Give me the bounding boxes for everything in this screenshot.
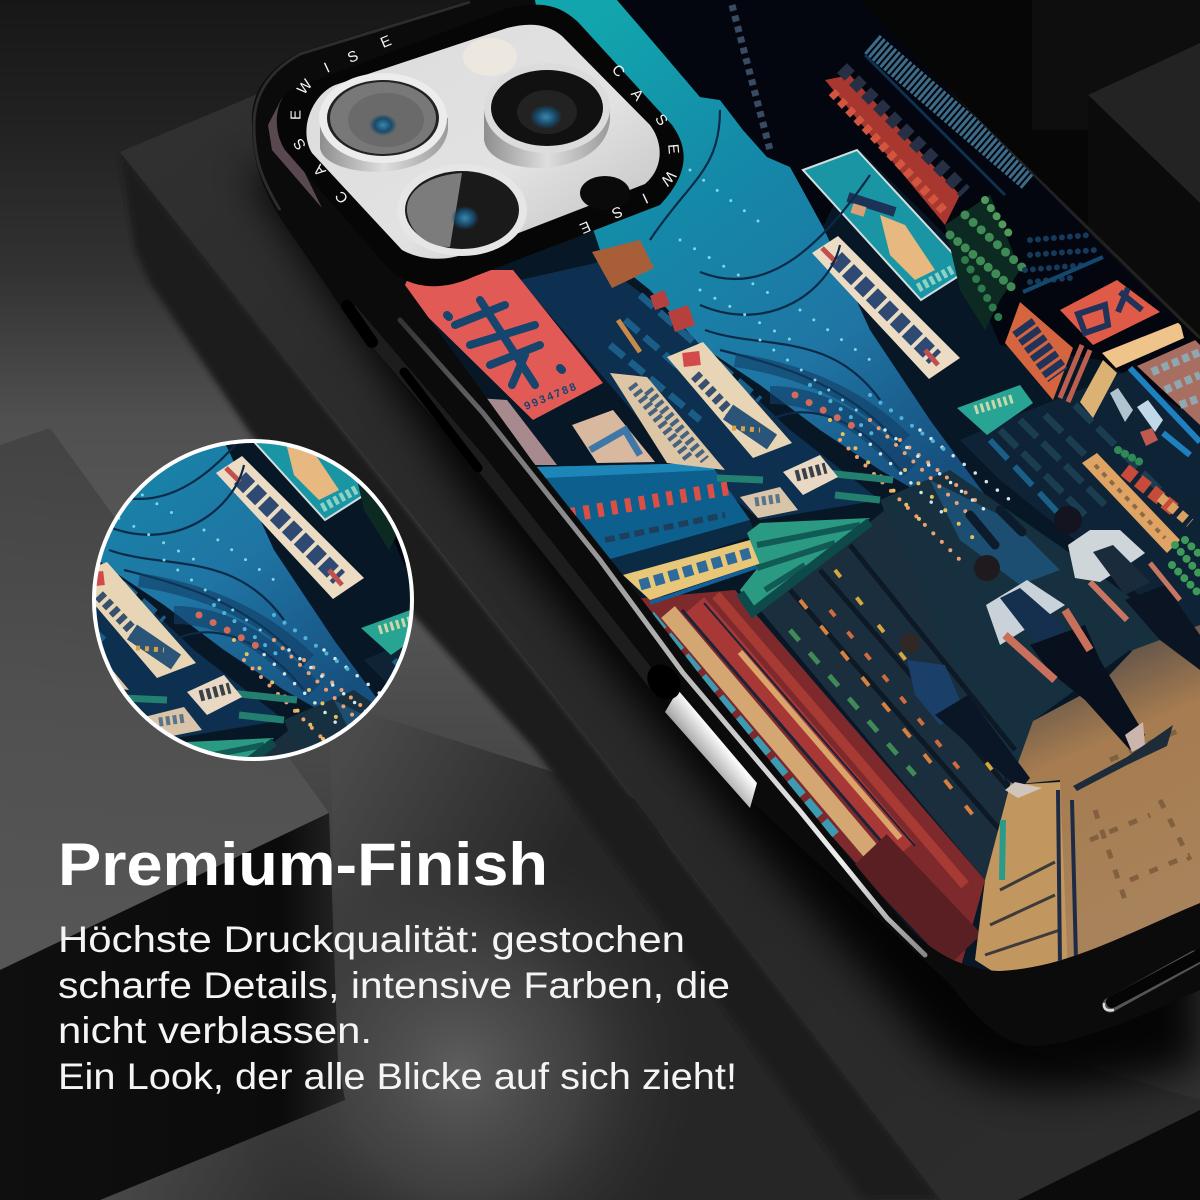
brand ring lettering: S bbox=[651, 111, 671, 129]
brand ring lettering: I bbox=[322, 59, 332, 77]
green plants at right bbox=[1172, 540, 1200, 595]
mute switch bbox=[347, 306, 372, 342]
person centre bbox=[974, 555, 1145, 752]
product boxes bbox=[1110, 388, 1190, 523]
side rail sheen bbox=[350, 310, 660, 690]
vent stripes bbox=[872, 44, 1030, 180]
phone: black case bbox=[252, 0, 1200, 1046]
red sign upper right bbox=[1060, 280, 1160, 345]
green small sign bbox=[957, 385, 1033, 435]
brand ring lettering: E bbox=[378, 32, 394, 52]
green awning bbox=[717, 470, 893, 612]
person shadow bbox=[1073, 725, 1173, 791]
person right bbox=[1054, 506, 1200, 670]
navy leaf cluster bbox=[1025, 235, 1095, 282]
shop wall tiles bbox=[1137, 338, 1200, 425]
right street-side shops bbox=[960, 370, 1200, 650]
printed artwork: neon city street bbox=[380, 0, 1200, 1000]
lidar sensor bbox=[580, 176, 630, 210]
side button silver bbox=[665, 690, 757, 808]
silver rail reflection bbox=[400, 320, 925, 955]
dark building top right bbox=[617, 0, 1200, 420]
sky bbox=[535, 0, 985, 510]
brand ring lettering: A bbox=[310, 161, 330, 179]
brand ring lettering: C bbox=[608, 61, 628, 81]
thin blue eave bbox=[1023, 257, 1103, 292]
flash bbox=[463, 38, 517, 76]
ground bbox=[1010, 625, 1200, 975]
body text bbox=[58, 919, 737, 1097]
brand ring lettering bbox=[288, 32, 682, 237]
dark shutter with coloured lights bbox=[760, 510, 1015, 880]
tan street banner bbox=[1082, 453, 1180, 553]
lens: ultra wide bbox=[397, 164, 527, 256]
crowd lights bbox=[795, 385, 1010, 560]
sign number: 9934788 bbox=[523, 380, 580, 413]
body text: nicht verblassen. bbox=[58, 1010, 372, 1051]
teal advertising sign bbox=[803, 150, 968, 300]
yellow label bbox=[1102, 322, 1184, 368]
person left bbox=[900, 633, 1042, 798]
barcode tag bbox=[1080, 360, 1117, 418]
brand ring lettering: E bbox=[664, 143, 682, 155]
side button recess bbox=[640, 658, 688, 706]
mauve sign bbox=[477, 398, 557, 465]
left pale text sign bbox=[610, 373, 725, 470]
art peek behind ring bbox=[268, 98, 322, 208]
lens: main bbox=[319, 73, 448, 172]
lens: telephoto bbox=[484, 63, 610, 168]
camera ring bbox=[277, 5, 684, 286]
volume button groove bbox=[404, 372, 478, 468]
camera island bbox=[277, 5, 684, 286]
orange hanging sign bbox=[1005, 302, 1090, 402]
case body bbox=[252, 0, 1200, 1046]
street bbox=[880, 470, 1200, 785]
brand ring lettering: W bbox=[294, 75, 317, 98]
tan sign bbox=[667, 342, 792, 458]
camera glass bbox=[306, 25, 660, 259]
brand ring lettering: E bbox=[288, 110, 304, 120]
yellow banner bbox=[623, 540, 765, 603]
orange awning fragment bbox=[592, 240, 654, 288]
body text: Ein Look, der alle Blicke auf sich zieht! bbox=[58, 1056, 737, 1097]
right case edge highlight bbox=[855, 0, 1200, 338]
brand ring lettering: E bbox=[577, 217, 593, 237]
sky sparkles bbox=[680, 170, 870, 420]
foliage bbox=[945, 195, 1025, 330]
distant pedestrians bbox=[970, 510, 1022, 545]
shop red and tan stripes bbox=[620, 590, 985, 970]
case upper rim bbox=[254, 2, 470, 210]
brand ring lettering: I bbox=[640, 189, 650, 207]
wires across sky bbox=[650, 110, 900, 470]
small paper signs bbox=[740, 455, 838, 518]
brand ring lettering: S bbox=[290, 135, 310, 153]
dark left wall under camera bbox=[520, 262, 880, 520]
body text: scharfe Details, intensive Farben, die bbox=[58, 965, 730, 1006]
big red sign bbox=[380, 270, 603, 420]
brand ring lettering: C bbox=[332, 187, 352, 207]
heading: Premium-Finish bbox=[58, 831, 548, 898]
blue shop sign bbox=[533, 463, 755, 578]
roof tiles bbox=[732, 5, 770, 150]
body text: Höchste Druckqualität: gestochen bbox=[58, 919, 685, 960]
charging port bbox=[1104, 955, 1200, 1010]
brand ring lettering: A bbox=[627, 86, 647, 104]
cream vertical sign bbox=[812, 236, 960, 379]
brick wall bbox=[825, 68, 965, 225]
brand ring lettering: W bbox=[656, 167, 679, 190]
phone soft shadow bbox=[245, 170, 1200, 1090]
brand ring lettering: S bbox=[345, 47, 361, 67]
brand ring lettering: S bbox=[609, 202, 625, 222]
blue shelves bbox=[1130, 368, 1200, 455]
zoom inset circle bbox=[0, 220, 604, 1200]
pink box sign bbox=[572, 410, 655, 463]
curb bricks bbox=[975, 782, 1076, 976]
